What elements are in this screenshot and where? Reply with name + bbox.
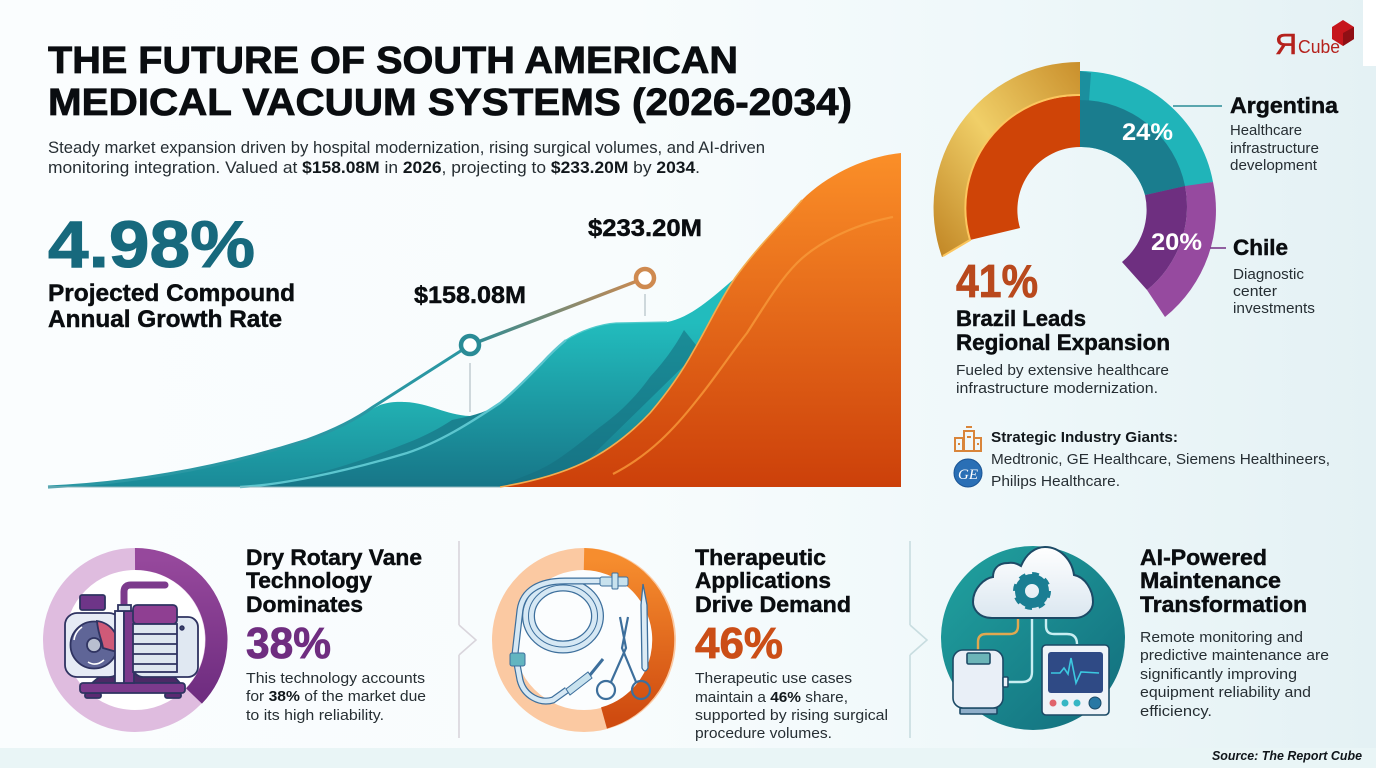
heading: AI-Powered	[1140, 545, 1267, 570]
description	[1140, 629, 1329, 720]
icon: cloud	[973, 547, 1093, 618]
icon: monitor	[1042, 645, 1109, 715]
description: maintain a 46% share,	[695, 689, 848, 706]
divider chevron 1	[459, 541, 476, 738]
heading: Transformation	[1140, 592, 1307, 617]
heading	[246, 545, 422, 617]
stat 46%: 46%	[695, 619, 783, 668]
scalpel	[641, 584, 648, 671]
drop lines	[470, 294, 645, 412]
Argentina label: Argentina	[1230, 93, 1339, 118]
dark teal band by orange	[495, 330, 700, 487]
Chile label: center	[1233, 283, 1277, 300]
Chile label	[1233, 235, 1315, 317]
description: predictive maintenance are	[1140, 647, 1329, 664]
description	[246, 670, 426, 724]
logo	[1275, 20, 1354, 61]
industry giants text	[991, 429, 1330, 490]
Argentina outer	[1080, 71, 1213, 195]
logo: Cube	[1298, 37, 1340, 57]
description: equipment reliability and	[1140, 684, 1311, 701]
Brazil callout: Brazil Leads	[956, 306, 1086, 331]
title	[48, 40, 852, 124]
source note: Source: The Report Cube	[1212, 749, 1362, 763]
connecting wires	[978, 618, 1077, 682]
Argentina share: 24%	[1122, 119, 1173, 146]
teal circle	[941, 546, 1125, 730]
Brazil callout: Fueled by extensive healthcare	[956, 362, 1169, 379]
growth line	[48, 345, 470, 487]
subtitle text	[48, 139, 765, 177]
ring chart 38%	[54, 559, 216, 721]
heading: Dry Rotary Vane	[246, 545, 422, 570]
Brazil highlight	[943, 95, 1080, 256]
dark teal sliver	[240, 409, 490, 487]
Chile outer	[1147, 182, 1216, 317]
industry giants text: Medtronic, GE Healthcare, Siemens Healthineers,	[991, 451, 1330, 468]
description: procedure volumes.	[695, 725, 832, 742]
industry giants text: Strategic Industry Giants:	[991, 429, 1178, 446]
CAGR stat	[48, 207, 295, 333]
Brazil callout	[956, 255, 1170, 397]
industry giants text: Philips Healthcare.	[991, 473, 1120, 490]
Brazil callout: 41%	[956, 255, 1038, 307]
heading	[695, 545, 851, 617]
logo: Я	[1275, 29, 1297, 61]
heading: Maintenance	[1140, 568, 1281, 593]
orange area	[500, 153, 901, 487]
value label 2026: $158.08M	[414, 282, 526, 309]
Argentina inner	[1080, 100, 1185, 195]
icon: gear	[1016, 574, 1048, 608]
description: significantly improving	[1140, 666, 1297, 683]
Brazil callout: infrastructure modernization.	[956, 380, 1158, 397]
description: to its high reliability.	[246, 707, 384, 724]
description	[695, 670, 888, 742]
heading: Technology	[246, 568, 373, 593]
description: for 38% of the market due	[246, 688, 426, 705]
Chile share: 20%	[1151, 229, 1202, 256]
panel: dry rotary vane	[54, 545, 426, 724]
heading: Dominates	[246, 592, 363, 617]
Chile inner	[1122, 186, 1187, 290]
teal hump area	[48, 402, 490, 487]
panel: therapeutic applications	[503, 545, 888, 742]
subtitle text: monitoring integration. Valued at $158.08M in 2026, projecting to $233.20M by 2034.	[48, 159, 700, 177]
subtitle text: Steady market expansion driven by hospital modernization, rising surgical volumes, and AI-driven	[48, 139, 765, 157]
description: Remote monitoring and	[1140, 629, 1303, 646]
marker 2026	[461, 336, 479, 354]
CAGR stat: 4.98%	[48, 207, 255, 281]
area growth chart	[48, 153, 901, 487]
teal edge highlight	[240, 340, 566, 487]
heading: Applications	[695, 568, 831, 593]
orange edge	[500, 200, 802, 487]
panel: AI-powered maintenance	[941, 545, 1329, 730]
icon: GE logo	[954, 459, 982, 487]
Chile label: Chile	[1233, 235, 1288, 260]
scissors	[597, 617, 650, 699]
heading	[1140, 545, 1307, 617]
heading: Therapeutic	[695, 545, 826, 570]
baseline	[48, 486, 500, 488]
icon: GE logo: GE	[958, 467, 978, 483]
orange inner line	[613, 217, 893, 474]
icon: vacuum pump	[65, 585, 198, 698]
title: MEDICAL VACUUM SYSTEMS (2026-2034)	[48, 82, 852, 124]
divider chevron 2	[910, 541, 927, 738]
icon: hospital building	[955, 427, 981, 451]
icon: tubing and surgical tools	[510, 573, 650, 701]
CAGR stat: Projected Compound	[48, 280, 295, 307]
ring chart 46%	[503, 559, 665, 721]
Argentina label: Healthcare	[1230, 122, 1302, 139]
regional donut chart	[934, 62, 1226, 317]
description: Therapeutic use cases	[695, 670, 852, 687]
Argentina label: infrastructure	[1230, 140, 1319, 157]
icon: vacuum device	[953, 650, 1008, 714]
teal front area	[240, 278, 735, 487]
leader lines	[1173, 106, 1226, 248]
value label 2034: $233.20M	[588, 215, 702, 242]
heading: Drive Demand	[695, 592, 851, 617]
title: THE FUTURE OF SOUTH AMERICAN	[48, 40, 738, 82]
Brazil callout: Regional Expansion	[956, 330, 1170, 355]
description: efficiency.	[1140, 703, 1212, 720]
Brazil segment	[965, 96, 1080, 240]
Brazil gold ring	[934, 62, 1080, 257]
CAGR stat: Annual Growth Rate	[48, 306, 282, 333]
description: This technology accounts	[246, 670, 425, 687]
stat 38%: 38%	[246, 619, 331, 668]
marker 2034	[636, 269, 654, 287]
Argentina label: development	[1230, 157, 1318, 174]
Chile label: Diagnostic	[1233, 266, 1304, 283]
tube coil	[515, 581, 600, 701]
Argentina label	[1230, 93, 1339, 174]
Chile label: investments	[1233, 300, 1315, 317]
description: supported by rising surgical	[695, 707, 888, 724]
